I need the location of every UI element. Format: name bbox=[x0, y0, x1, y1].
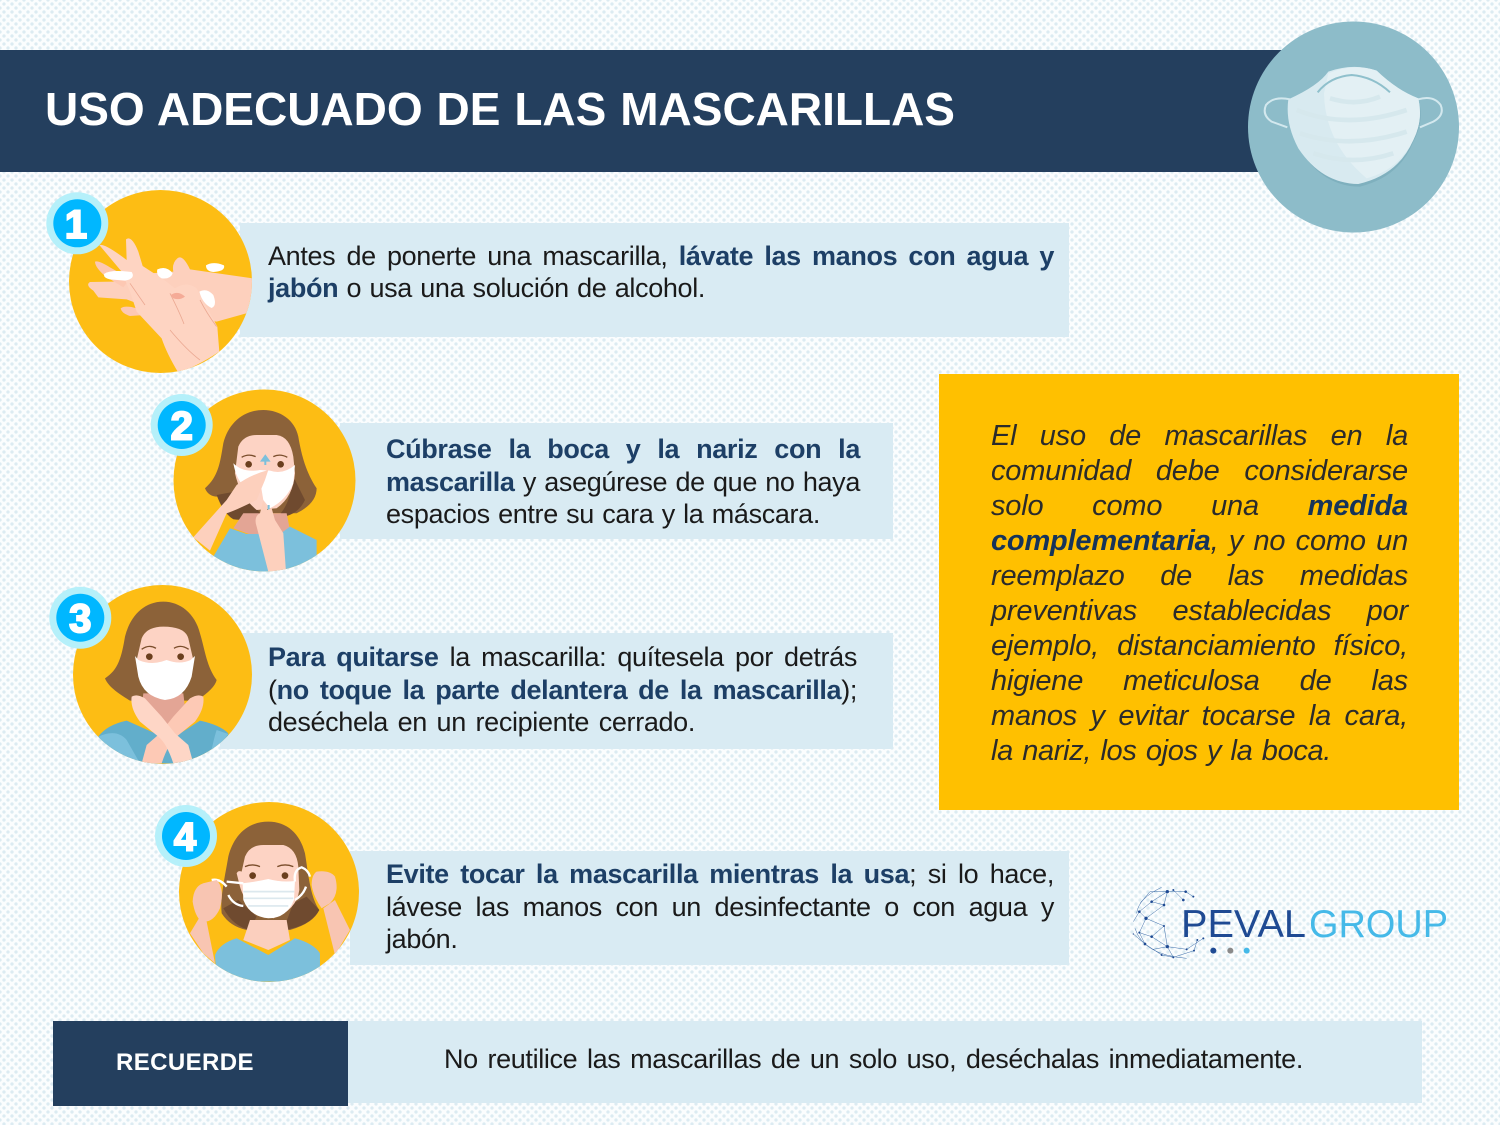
step 1 text: Antes de ponerte una mascarilla, lávate las manos con agua y bbox=[268, 241, 1054, 271]
step 3 text: (no toque la parte delantera de la mascarilla); bbox=[268, 675, 857, 705]
yellow callout panel bbox=[939, 374, 1459, 810]
step 3 text bbox=[268, 642, 857, 737]
step 3 text: deséchela en un recipiente cerrado. bbox=[268, 707, 695, 737]
step 1 panel background bbox=[240, 223, 1069, 337]
header band bbox=[0, 50, 1290, 172]
callout text: reemplazo de las medidas bbox=[991, 560, 1408, 592]
RECUERDE label bbox=[53, 1021, 348, 1106]
step 3: removing the mask bbox=[49, 585, 893, 764]
step 2 text: Cúbrase la boca y la nariz con la bbox=[386, 434, 860, 464]
callout text: complementaria, y no como un bbox=[991, 524, 1408, 556]
callout text: solo como una medida bbox=[991, 490, 1408, 522]
step 2 number badge: 2 bbox=[171, 404, 193, 448]
step 3 text: Para quitarse la mascarilla: quítesela por detrás bbox=[268, 642, 857, 672]
callout text: manos y evitar tocarse la cara, bbox=[991, 700, 1408, 732]
icon: face mask in circle bbox=[1248, 22, 1459, 232]
callout text: comunidad debe considerarse bbox=[991, 454, 1408, 486]
step 4 illustration: woman putting on mask bbox=[155, 802, 359, 982]
step 2 text: mascarilla y asegúrese de que no haya bbox=[386, 467, 860, 497]
step 2 text: espacios entre su cara y la máscara. bbox=[386, 499, 820, 529]
step 4 text bbox=[385, 859, 1054, 954]
step 1 text: jabón o usa una solución de alcohol. bbox=[268, 273, 705, 303]
step 2 illustration: woman adjusting mask bbox=[150, 390, 356, 572]
reminder text: No reutilice las mascarillas de un solo uso, deséchalas inmediatamente. bbox=[444, 1044, 1303, 1074]
step 2 panel background bbox=[340, 423, 893, 539]
step 4 text: Evite tocar la mascarilla mientras la usa; si lo hace, bbox=[386, 859, 1054, 889]
step 1 number badge: 1 bbox=[65, 203, 87, 247]
step 4 number badge bbox=[155, 805, 217, 867]
title: USO ADECUADO DE LAS MASCARILLAS bbox=[45, 83, 955, 135]
step 3 illustration: woman with crossed arms bbox=[49, 585, 252, 764]
step 1 text bbox=[268, 241, 1054, 303]
step 4 text: lávese las manos con un desinfectante o con agua y bbox=[386, 892, 1054, 922]
callout text: la nariz, los ojos y la boca. bbox=[991, 734, 1331, 766]
logo: Peval Group: GROUP bbox=[1309, 903, 1448, 946]
callout text bbox=[990, 420, 1410, 766]
step 1 illustration: hands bbox=[46, 190, 252, 373]
callout text: El uso de mascarillas en la bbox=[991, 420, 1408, 452]
callout text: higiene meticulosa de las bbox=[991, 664, 1408, 696]
step 4 text: jabón. bbox=[386, 924, 457, 954]
step 2 number badge bbox=[151, 394, 213, 456]
step 3 number badge bbox=[49, 587, 111, 649]
step 4 panel background bbox=[350, 851, 1069, 965]
reminder bar bbox=[53, 1021, 1422, 1106]
callout text: ejemplo, distanciamiento físico, bbox=[991, 630, 1408, 662]
step 4 number badge: 4 bbox=[174, 816, 197, 860]
step 2 text bbox=[386, 434, 861, 529]
callout text: preventivas establecidas por bbox=[991, 594, 1408, 626]
step 3 number badge: 3 bbox=[69, 597, 91, 641]
step 1 number badge bbox=[46, 192, 108, 254]
step 4: avoid touching the mask bbox=[155, 802, 1069, 982]
step 3 panel background bbox=[220, 633, 893, 749]
step 1: wash hands bbox=[46, 190, 1069, 373]
logo: Peval Group: PEVAL bbox=[1181, 903, 1306, 946]
reminder message panel bbox=[348, 1021, 1422, 1103]
RECUERDE word: RECUERDE bbox=[116, 1049, 254, 1076]
logo: Peval Group bbox=[1132, 887, 1448, 959]
step 2: cover mouth and nose bbox=[150, 390, 893, 572]
